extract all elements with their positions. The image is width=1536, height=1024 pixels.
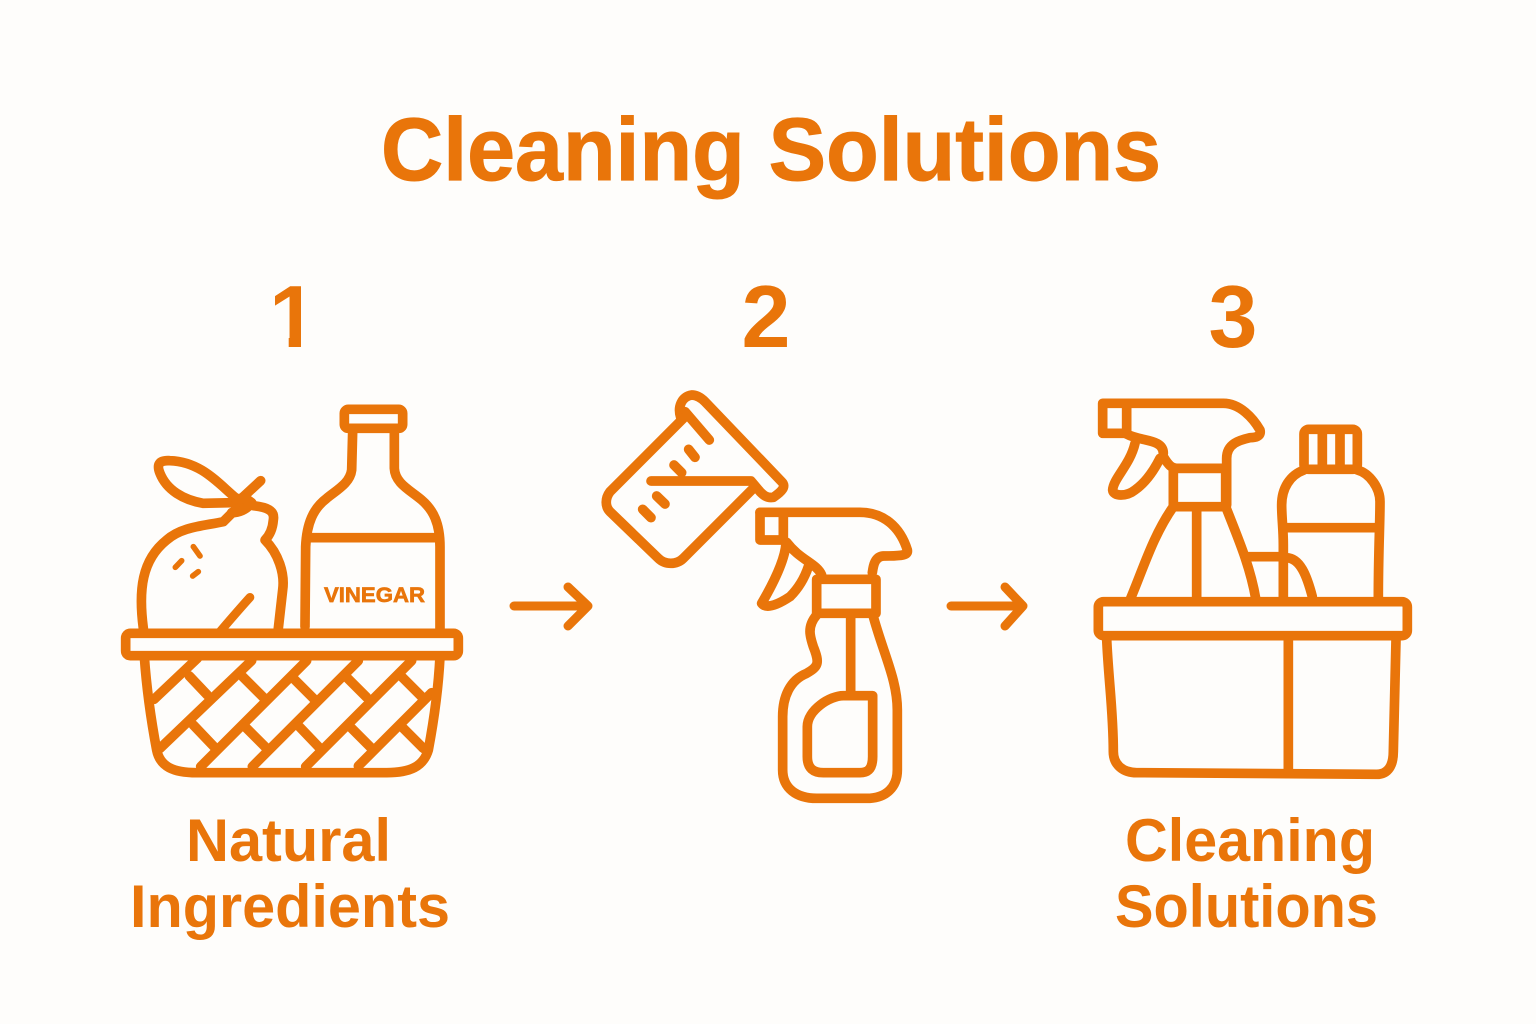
label: cleaning solutions: Solutions bbox=[1115, 873, 1378, 940]
icon: beaker pouring into spray bottle bbox=[606, 395, 907, 798]
caddy bbox=[1098, 602, 1407, 774]
title: Cleaning Solutions bbox=[381, 99, 1161, 199]
basket weave bbox=[126, 633, 458, 773]
arrow 2 to 3 bbox=[951, 587, 1023, 626]
icon: caddy with spray bottle and cleaner bbox=[1098, 403, 1407, 774]
measuring beaker bbox=[606, 395, 784, 563]
icon: basket with fruit and vinegar bottle bbox=[126, 409, 458, 773]
vinegar bottle bbox=[305, 409, 440, 628]
spray bottle in caddy bbox=[1103, 403, 1283, 598]
label: cleaning solutions bbox=[1115, 807, 1378, 940]
cleaner bottle bbox=[1282, 429, 1380, 598]
label: natural ingredients bbox=[130, 807, 450, 940]
step number 3: 3 bbox=[1209, 267, 1257, 366]
label: natural ingredients: Ingredients bbox=[130, 873, 450, 940]
spray bottle bbox=[760, 512, 907, 798]
step number 1: 1 bbox=[269, 267, 318, 366]
vinegar label: VINEGAR bbox=[324, 584, 425, 607]
step number 2: 2 bbox=[742, 267, 790, 366]
label: cleaning solutions: Cleaning bbox=[1125, 807, 1375, 874]
fruit with leaf bbox=[141, 461, 283, 632]
arrow 1 to 2 bbox=[514, 587, 588, 626]
label: natural ingredients: Natural bbox=[186, 807, 391, 874]
